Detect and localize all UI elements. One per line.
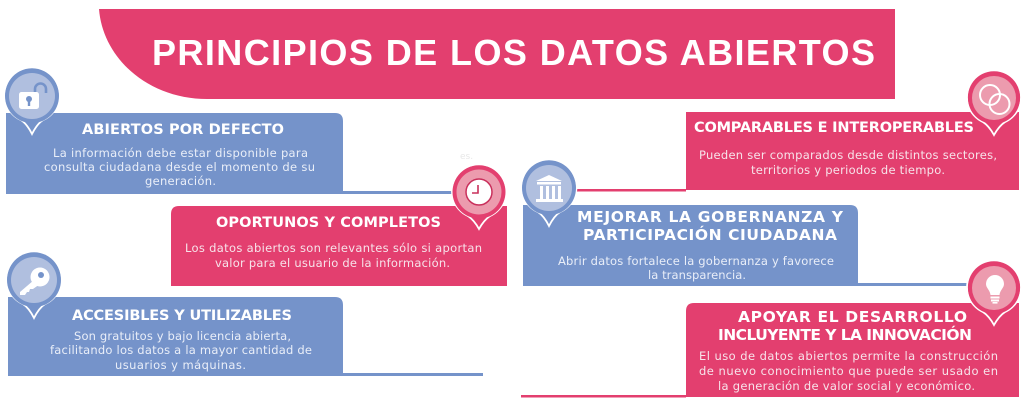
text block: territorios y periodos de tiempo. [751, 163, 945, 177]
heading: ACCESIBLES Y UTILIZABLES [72, 308, 292, 324]
text block: consulta ciudadana desde el momento de su [44, 160, 315, 174]
text block: Son gratuitos y bajo licencia abierta, [74, 329, 291, 343]
text block: la generación de valor social y económico. [718, 379, 975, 393]
text block: generación. [145, 174, 216, 188]
text block [44, 146, 315, 188]
panel: mejorar la gobernanza [522, 159, 970, 286]
icon: institution building [522, 159, 576, 226]
icon: clock [452, 164, 506, 229]
panel: apoyar el desarrollo [521, 260, 1021, 398]
panel: abiertos por defecto [5, 67, 455, 194]
text block: la transparencia. [648, 268, 746, 282]
heading: OPORTUNOS Y COMPLETOS [216, 215, 441, 231]
icon: key [7, 251, 62, 318]
faint stray text: es. [460, 152, 473, 162]
heading [718, 308, 972, 344]
heading: COMPARABLES E INTEROPERABLES [694, 120, 974, 136]
heading: PARTICIPACIÓN CIUDADANA [583, 225, 837, 244]
title banner [99, 9, 895, 99]
icon: light bulb [967, 260, 1021, 325]
heading [577, 208, 844, 244]
panel: oportunos y completos [171, 164, 507, 286]
text block: facilitando los datos a la mayor cantidad de [50, 343, 312, 357]
text block: usuarios y máquinas. [115, 358, 246, 372]
text block [558, 254, 834, 282]
text block: valor para el usuario de la información. [215, 256, 450, 270]
text block [185, 241, 482, 270]
text block: de nuevo conocimiento que puede ser usado en [699, 364, 998, 378]
text block [699, 148, 997, 177]
text block: La información debe estar disponible para [53, 146, 308, 160]
heading: APOYAR EL DESARROLLO [738, 308, 967, 326]
heading: INCLUYENTE Y LA INNOVACIÓN [718, 325, 972, 344]
heading: MEJORAR LA GOBERNANZA Y [577, 208, 844, 226]
text block [50, 329, 312, 372]
text block: Los datos abiertos son relevantes sólo si aportan [185, 241, 482, 255]
icon: open padlock [5, 67, 60, 134]
heading: ABIERTOS POR DEFECTO [82, 122, 284, 138]
icon: interlocked rings [967, 70, 1021, 135]
panel: comparables e interoperables [522, 70, 1021, 192]
panel: accesibles y utilizables [7, 251, 483, 376]
text block: Abrir datos fortalece la gobernanza y favorece [558, 254, 834, 268]
text block: El uso de datos abiertos permite la construcción [699, 349, 998, 363]
text block [699, 349, 998, 393]
text block: Pueden ser comparados desde distintos sectores, [699, 148, 997, 162]
title: PRINCIPIOS DE LOS DATOS ABIERTOS [152, 32, 875, 73]
